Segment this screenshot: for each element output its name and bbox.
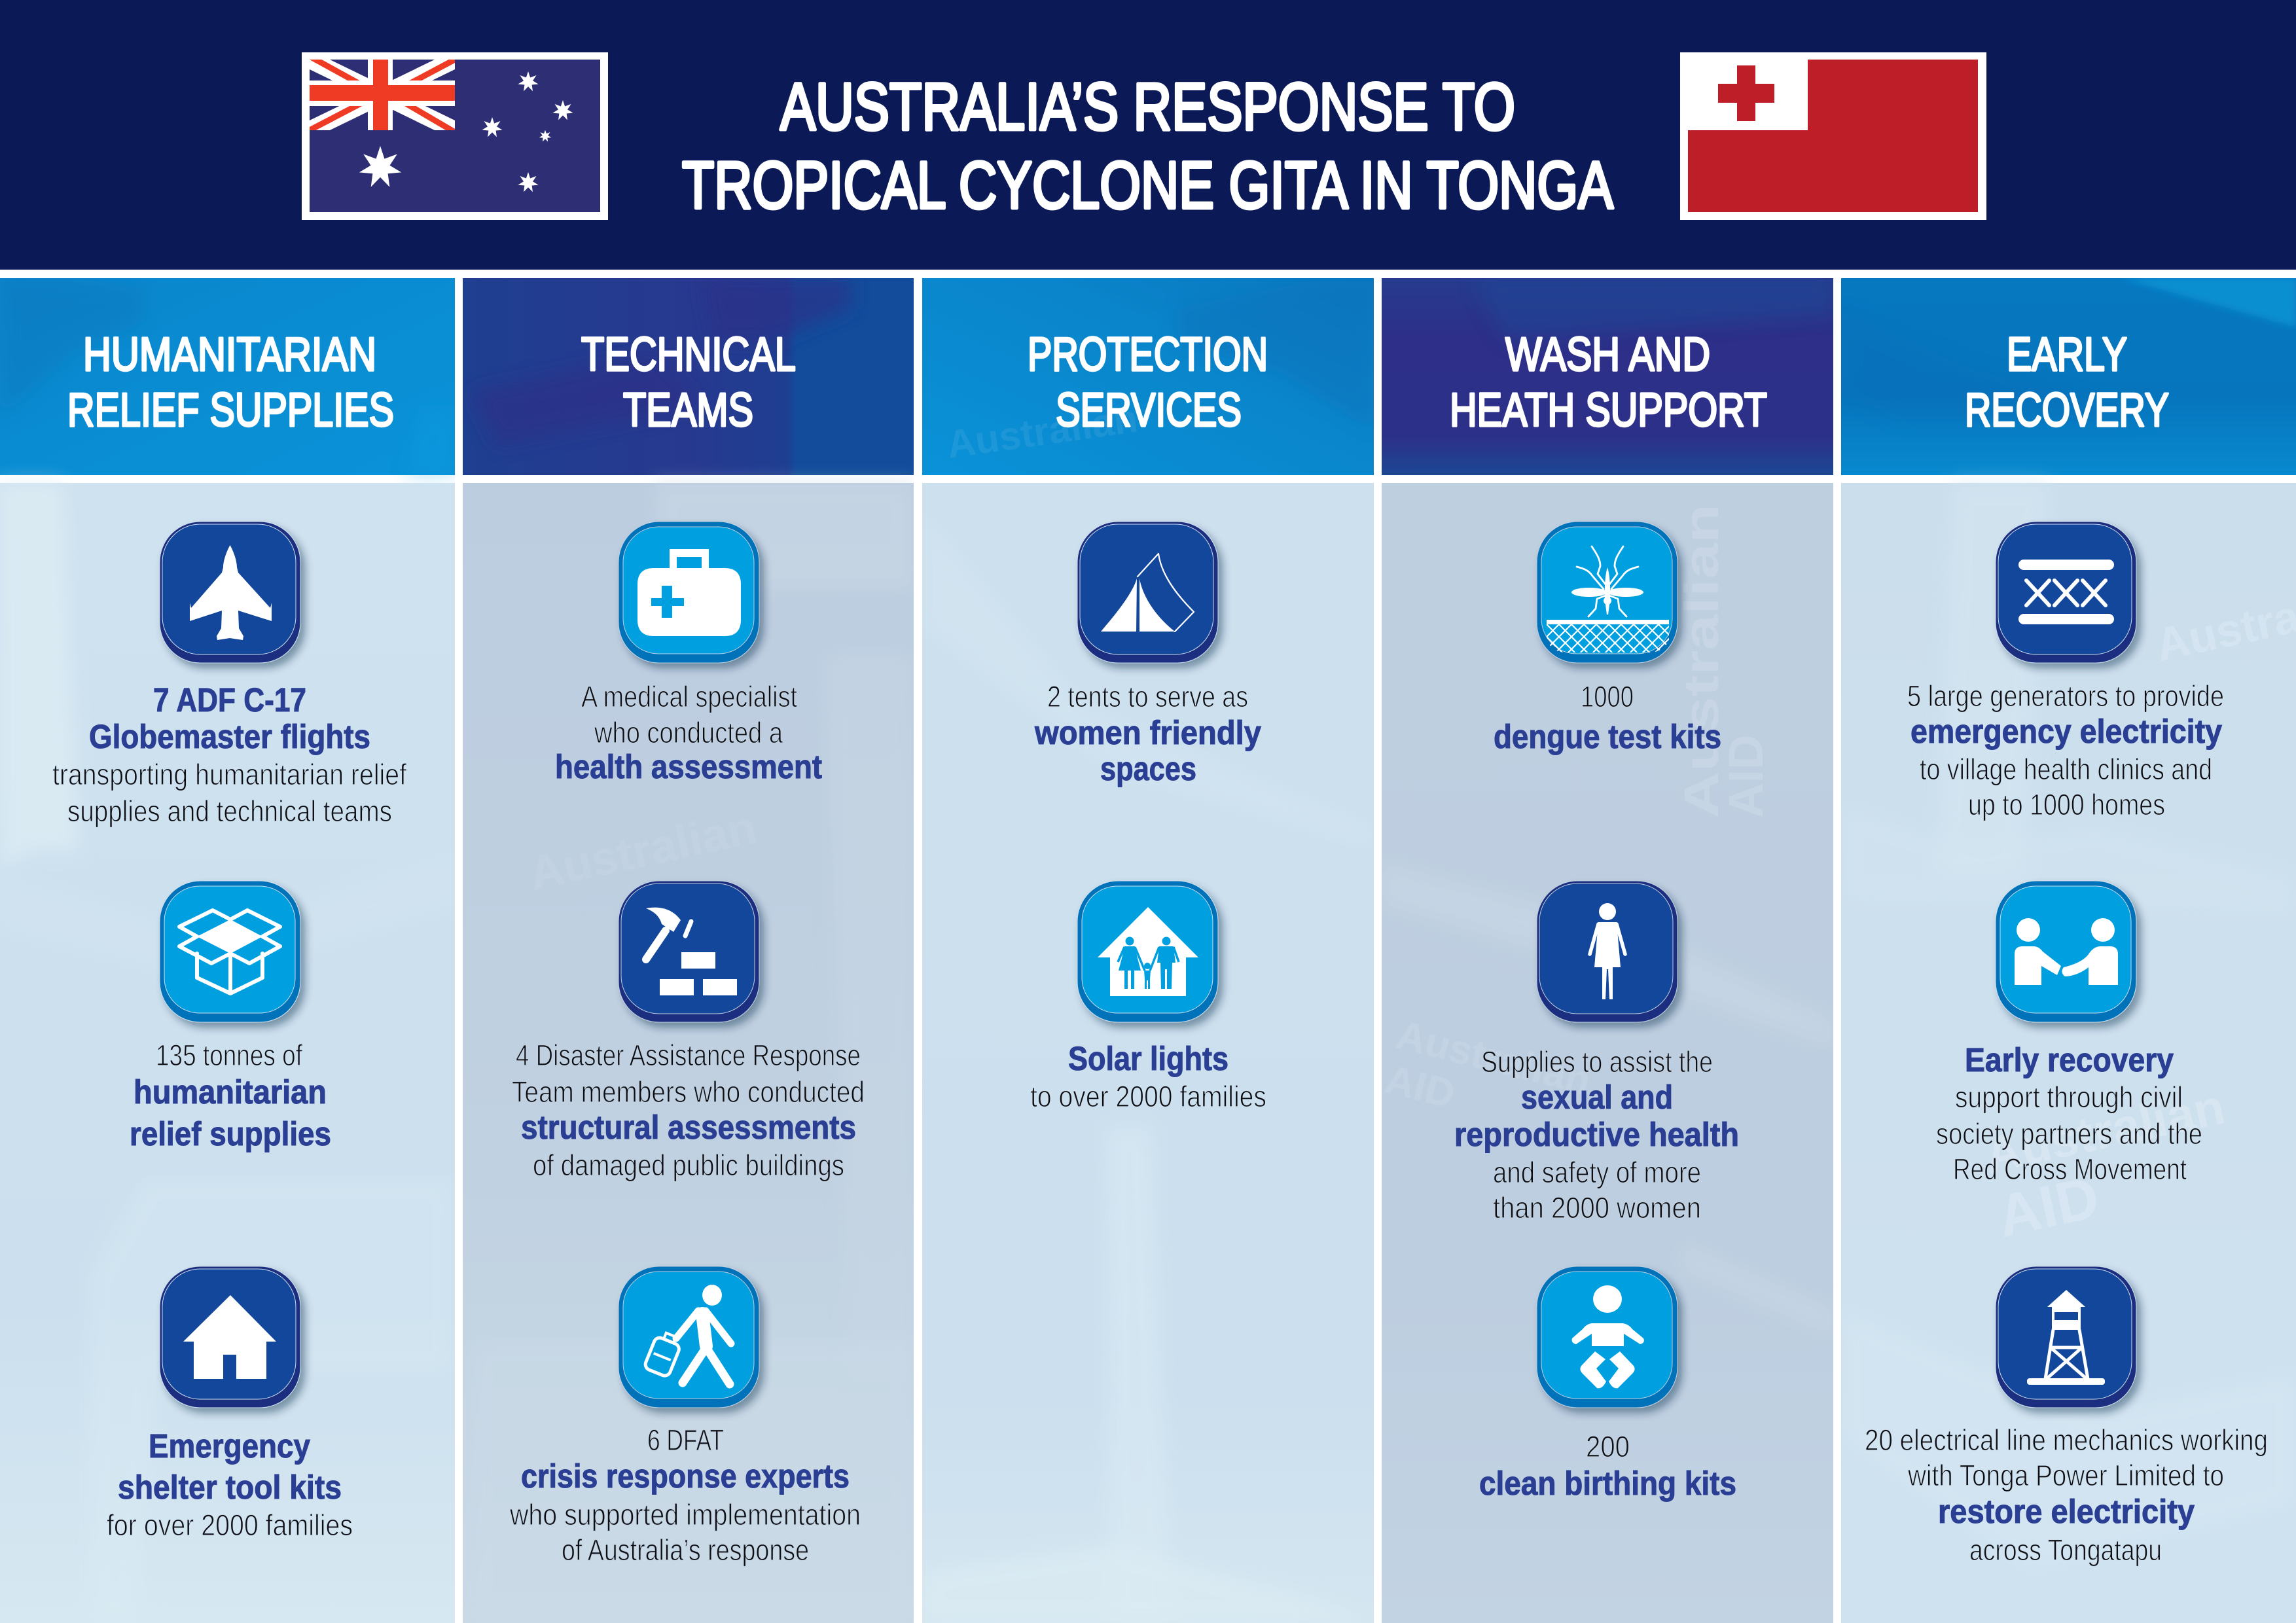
text: medical specialist: health assessment <box>555 748 822 785</box>
text: solar lights: Solar lights <box>1068 1040 1229 1077</box>
text: medical specialist <box>555 680 822 785</box>
text: emergency electricity: emergency electricity <box>1910 713 2223 750</box>
column heading: RELIEF SUPPLIES <box>67 384 394 437</box>
item: emergency electricity <box>1907 522 2224 821</box>
item: early recovery support <box>1936 881 2202 1186</box>
text: flights: transporting humanitarian relief <box>52 758 406 791</box>
text: women friendly spaces: spaces <box>1100 750 1196 787</box>
text: women friendly spaces: women friendly <box>1034 714 1262 751</box>
panel: protection services <box>922 278 1374 1623</box>
text: women friendly spaces: 2 tents to serve as <box>1047 680 1248 713</box>
text: relief supplies: relief supplies <box>130 1115 331 1152</box>
text: medical specialist: A medical specialist <box>581 680 797 713</box>
text: flights <box>52 681 406 828</box>
text: early recovery support: support through civil <box>1955 1080 2183 1114</box>
text: dengue test kits <box>1494 680 1721 755</box>
column background <box>1381 483 1833 1623</box>
item: flights <box>52 522 406 828</box>
watermark: Australian AID lower <box>1980 1079 2244 1250</box>
panel: technical teams <box>463 278 914 1623</box>
icon: tent <box>1077 522 1218 663</box>
text: early recovery support: Red Cross Movement <box>1953 1152 2187 1186</box>
text: solar lights: to over 2000 families <box>1030 1080 1266 1113</box>
column heading: SERVICES <box>1056 384 1242 437</box>
icon: medical kit <box>619 522 759 663</box>
text: shelter: shelter tool kits <box>118 1469 342 1506</box>
flag: Tonga <box>1680 52 1986 220</box>
text: flights: Globemaster flights <box>89 718 370 755</box>
panel: humanitarian relief supplies <box>0 278 458 1623</box>
column heading: EARLY <box>2007 329 2127 381</box>
text: dengue test kits: 1000 <box>1581 680 1634 713</box>
icon: woman <box>1537 881 1677 1022</box>
text: dengue test kits: dengue test kits <box>1494 718 1721 755</box>
item: dengue test kits <box>1494 522 1721 755</box>
text: restore electricity <box>1865 1423 2268 1567</box>
column heading <box>0 278 455 475</box>
column heading <box>463 278 914 475</box>
text: early recovery support <box>1936 1041 2202 1186</box>
item: medical specialist <box>555 522 822 785</box>
text: disaster assistance team <box>512 1039 865 1182</box>
text: shelter: for over 2000 families <box>107 1508 353 1542</box>
title: TROPICAL CYCLONE GITA IN TONGA <box>682 148 1613 223</box>
text: crisis response experts: crisis response experts <box>521 1457 850 1495</box>
watermark: Australian AID: Australian <box>525 801 761 901</box>
item: women friendly spaces <box>1034 522 1262 787</box>
header band <box>0 0 2296 270</box>
column background <box>922 483 1374 1623</box>
icon: generator <box>1996 522 2136 663</box>
watermark: Australian AID vertical <box>1674 504 1773 818</box>
text: early recovery support: Early recovery <box>1965 1041 2174 1079</box>
icon: family in house <box>1077 881 1218 1022</box>
text: clean birthing kits: 200 <box>1586 1430 1630 1463</box>
column background <box>0 483 458 1623</box>
icon: handshake <box>1996 881 2136 1022</box>
title: AUSTRALIA’S RESPONSE TO <box>780 69 1515 144</box>
panel: early recovery <box>1841 278 2296 1623</box>
column heading: TECHNICAL <box>581 329 796 381</box>
icon: house <box>160 1266 300 1408</box>
icon: open box <box>160 881 300 1022</box>
item: crisis response experts <box>509 1266 861 1567</box>
text: restore electricity: restore electricity <box>1938 1493 2195 1530</box>
item: shelter <box>107 1266 353 1542</box>
icon: mosquito over net <box>1537 522 1677 663</box>
column heading: PROTECTION <box>1028 329 1268 381</box>
panel: wash and health support <box>1381 278 1833 1623</box>
watermark: Australian AID lower: AID <box>1992 1165 2105 1250</box>
text: flights: 7 ADF C-17 <box>153 681 306 719</box>
icon: plane <box>160 522 300 663</box>
text: early recovery support: society partners and the <box>1936 1117 2202 1150</box>
text: disaster assistance team: of damaged public buildings <box>533 1149 844 1182</box>
column heading: HEATH SUPPORT <box>1450 384 1767 437</box>
text: crisis response experts <box>509 1423 861 1567</box>
watermark: Australian AID lower: AID <box>1381 1057 1460 1117</box>
icon: walking person with bag <box>619 1266 759 1408</box>
text: crisis response experts: 6 DFAT <box>647 1423 724 1457</box>
text: shelter: Emergency <box>149 1427 311 1465</box>
item: disaster assistance team <box>512 881 865 1182</box>
text: emergency electricity: 5 large generators to provide <box>1907 679 2224 713</box>
icon: baby <box>1537 1266 1677 1408</box>
title <box>682 69 1613 223</box>
text: solar lights <box>1030 1040 1266 1113</box>
column background <box>463 483 914 1623</box>
text: flights: supplies and technical teams <box>67 794 392 828</box>
text: clean birthing kits <box>1479 1430 1736 1502</box>
item: restore electricity <box>1865 1266 2268 1567</box>
text: medical specialist: who conducted a <box>594 716 783 749</box>
watermark: Australian AID lower <box>1381 1012 1596 1149</box>
item: clean birthing kits <box>1479 1266 1736 1502</box>
text: sexual and reproductive health <box>1454 1045 1739 1224</box>
column heading <box>1841 278 2296 475</box>
column heading <box>1382 278 1833 475</box>
column heading <box>922 278 1374 475</box>
text: crisis response experts: of Australia’s response <box>562 1533 809 1567</box>
text: sexual and reproductive health: than 2000 women <box>1493 1191 1701 1224</box>
text: emergency electricity: up to 1000 homes <box>1968 788 2165 821</box>
text: sexual and reproductive health: Supplies to assist the <box>1481 1045 1713 1079</box>
flag: Australia <box>302 52 608 220</box>
watermark: Australian AID lower: Australian <box>1392 1012 1596 1104</box>
text: emergency electricity <box>1907 679 2224 821</box>
watermark: Australian AID lower: Australian <box>1980 1079 2229 1184</box>
text: disaster assistance team: structural assessments <box>521 1109 856 1146</box>
watermark: Australian AID vertical: AID <box>1719 735 1773 818</box>
text: emergency electricity: to village health clinics and <box>1920 753 2212 786</box>
item: sexual and reproductive health <box>1454 881 1739 1224</box>
watermark: Australian: Australian <box>944 397 1140 467</box>
column heading: TEAMS <box>623 384 753 437</box>
text: women friendly spaces <box>1034 680 1262 787</box>
text: clean birthing kits: clean birthing kits <box>1479 1465 1736 1502</box>
text: restore electricity: across Tongatapu <box>1969 1533 2162 1567</box>
text: disaster assistance team: Team members who conducted <box>512 1075 865 1109</box>
text: disaster assistance team: 4 Disaster Assistance Response <box>516 1039 861 1072</box>
text: sexual and reproductive health: and safety of more <box>1493 1156 1701 1189</box>
icon: hammer and bricks <box>619 881 759 1022</box>
column background <box>1841 483 2296 1623</box>
text: restore electricity: with Tonga Power Limited to <box>1907 1459 2224 1492</box>
text: shelter <box>107 1427 353 1542</box>
icon: tower <box>1996 1266 2136 1408</box>
item: relief supplies <box>130 881 331 1152</box>
column heading: WASH AND <box>1505 329 1710 381</box>
text: relief supplies: 135 tonnes of <box>156 1039 302 1072</box>
text: relief supplies <box>130 1039 331 1152</box>
text: sexual and reproductive health: reproductive health <box>1454 1116 1739 1153</box>
watermark: Australian AID vertical: Australian <box>1674 504 1729 818</box>
text: crisis response experts: who supported implementation <box>509 1498 861 1531</box>
text: sexual and reproductive health: sexual and <box>1521 1079 1673 1116</box>
item: solar lights <box>1030 881 1266 1113</box>
text: relief supplies: humanitarian <box>134 1073 327 1111</box>
column heading: HUMANITARIAN <box>83 329 376 381</box>
column heading: RECOVERY <box>1965 384 2169 437</box>
